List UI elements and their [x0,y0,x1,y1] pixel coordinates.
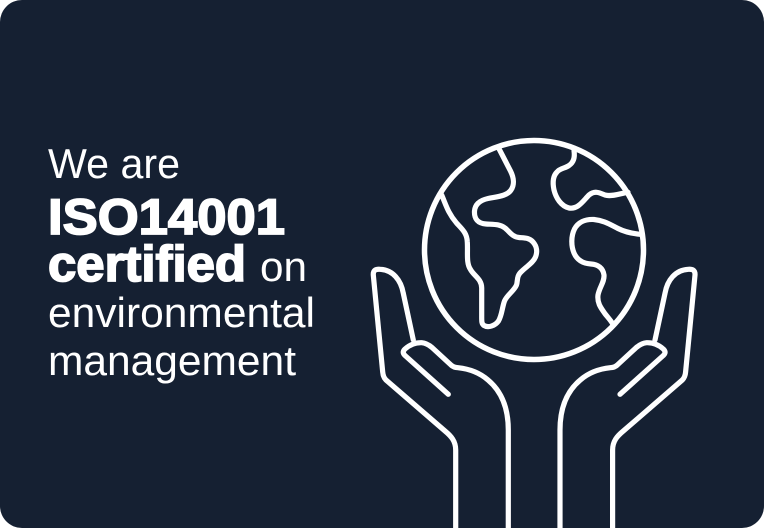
heading text block: on [260,243,307,290]
heading text block: We are [48,140,180,187]
right thumb and palm [560,343,665,528]
heading text block: environmental [48,289,315,336]
icon: right hand [560,269,695,528]
heading text block: ISO14001 [48,189,285,245]
heading text block: certified [48,236,246,292]
thumb and palm [403,343,508,528]
heading text block: management [48,337,296,384]
icon: hands holding globe [373,140,695,528]
icon: left hand [373,269,508,528]
icon: globe [424,140,644,360]
heading text block [48,140,315,384]
